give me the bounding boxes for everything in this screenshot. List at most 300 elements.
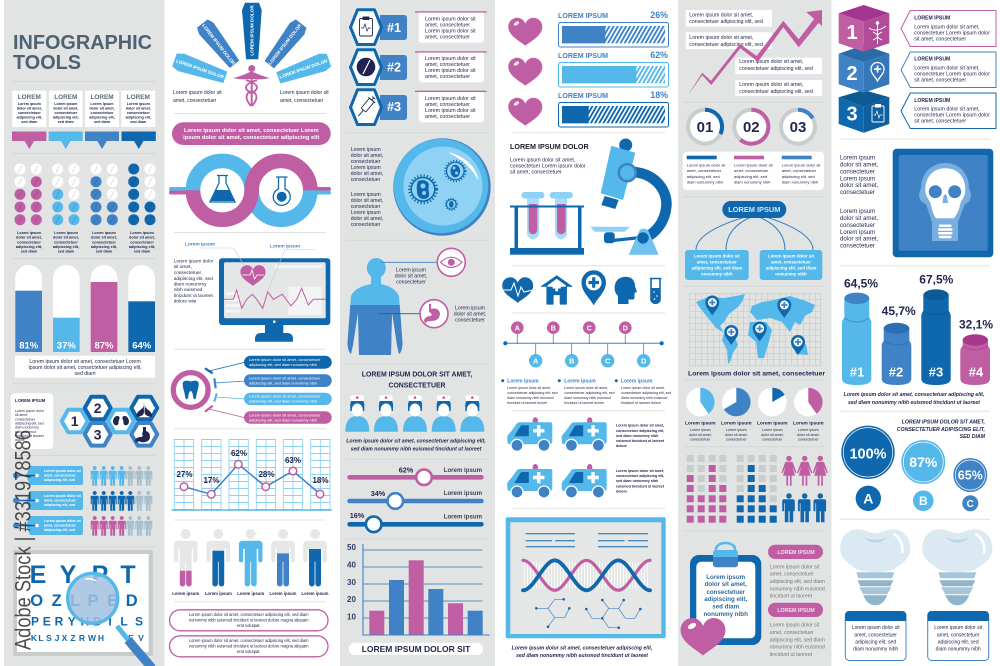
tooth ring diagram: Lorem ipsum dolor sit amet, consectetuer bbox=[249, 412, 321, 417]
text: x-ray: Lorem ipsum bbox=[840, 154, 875, 161]
x-ray skull bbox=[893, 149, 993, 257]
text card: lorem ipsum: consectetuer bbox=[15, 417, 36, 421]
three bulleted columns: consectetuer adipiscing elit, sed bbox=[507, 391, 558, 395]
pink heading pill: ipsum dolor sit amet, consectetuer adipiscing elit bbox=[183, 135, 319, 141]
cube callouts: consectetuer Lorem ipsum dolor bbox=[914, 113, 990, 119]
DNA caption: Lorem ipsum dolor sit amet, consectetuer adipiscing elit, bbox=[512, 646, 652, 652]
text: x-ray: Lorem ipsum bbox=[840, 229, 875, 236]
flow diagram: Lorem ipsum dolor sit bbox=[694, 254, 740, 259]
pink pills with gray text: amet, consectetuer bbox=[770, 630, 814, 636]
pie charts: Lorem ipsum bbox=[721, 420, 752, 426]
text card: lorem ipsum: Lorem ipsum dolor bbox=[15, 409, 45, 413]
ambulance text 2: sed diam nonummy nibh bbox=[616, 479, 658, 483]
tooth ring diagram: adipiscing elit, sed diam nonummy nibh bbox=[249, 399, 317, 404]
stacked cubes: 2 bbox=[846, 63, 858, 85]
hearts bbox=[508, 18, 542, 126]
text: radial left: Lorem ipsum dolor sit bbox=[173, 90, 222, 96]
panel: four lorem cards: LOREM bbox=[54, 94, 77, 101]
ambulances bbox=[507, 417, 607, 498]
human body diagram bbox=[348, 248, 486, 355]
flow diagram: amet, consectetuer bbox=[771, 260, 811, 265]
pie charts: Lorem ipsum bbox=[793, 420, 824, 426]
panel: four lorem cards: dolor sit amet, bbox=[89, 106, 115, 110]
text boxes with pink rule: amet, consectetuer bbox=[425, 22, 470, 28]
eye chart bbox=[13, 550, 153, 656]
progress bars: 26% bbox=[650, 10, 668, 20]
pill captions: consectetuer bbox=[130, 240, 154, 244]
pink pills with gray text: nonummy nibh euismod bbox=[770, 645, 825, 651]
pink heading pill: Lorem ipsum dolor sit amet, consectetuer Lorem bbox=[184, 128, 319, 134]
three bulleted columns: diam nonummy nibh euismod bbox=[621, 396, 667, 400]
text card: lorem ipsum: tincidunt ut laoreet bbox=[15, 434, 44, 438]
percent circles heading: CONSECTETUER ADIPISCING ELIT, bbox=[897, 427, 985, 433]
timeline: C bbox=[587, 325, 592, 332]
donut legend card: amet, consectetuer bbox=[782, 168, 817, 173]
tooth ring diagram bbox=[173, 356, 332, 424]
outlined text box 1: Lorem ipsum dolor sit amet, consectetuer adipiscing elit, sed diam bbox=[189, 612, 309, 617]
world map bbox=[690, 293, 821, 366]
text: petri dish: Lorem ipsum bbox=[351, 210, 381, 216]
DNA panel bbox=[506, 517, 666, 638]
bar chart caption bbox=[15, 356, 155, 378]
eye chart: E bbox=[43, 615, 51, 629]
clipboard with heart: consectetuer bbox=[706, 589, 746, 596]
text boxes behind arrow: Lorem ipsum dolor sit amet, bbox=[689, 35, 753, 41]
three bulleted columns: Lorem ipsum dolor sit amet, bbox=[621, 386, 665, 390]
text: x-ray: dolor sit amet, bbox=[840, 182, 879, 189]
text card: lorem ipsum: LOREM IPSUM bbox=[15, 398, 46, 403]
stacked cubes: 1 bbox=[846, 22, 858, 44]
eye chart: L bbox=[38, 633, 44, 643]
bar chart: 40 bbox=[347, 560, 356, 570]
pie charts: Lorem ipsum bbox=[757, 420, 788, 426]
sliders: 62% bbox=[399, 465, 414, 474]
human body diagram: consectetuer bbox=[455, 318, 485, 324]
outlined text box 2 bbox=[170, 636, 328, 657]
cube callouts: LOREM IPSUM bbox=[914, 57, 950, 63]
background panel: column 3 bbox=[340, 0, 495, 666]
bar chart: 10 bbox=[347, 612, 356, 621]
women and men pictograms bbox=[781, 456, 828, 522]
hexagon cluster: 2 bbox=[94, 400, 102, 416]
stock watermark: Adobe Stock | #331978586 bbox=[10, 430, 36, 650]
progress bars: LOREM IPSUM bbox=[558, 12, 608, 20]
pill captions: dolor sit amet, bbox=[129, 236, 155, 240]
cylinder chart: 45,7% bbox=[882, 304, 916, 318]
radial banners: LOREM IPSUM DOLOR bbox=[201, 23, 236, 66]
human fill figures: Lorem ipsum bbox=[172, 591, 199, 596]
pill captions: sed diam bbox=[96, 250, 113, 254]
text: x-ray: Lorem ipsum bbox=[840, 175, 875, 182]
pill captions bbox=[16, 231, 155, 254]
three bulleted columns: consectetuer adipiscing elit, sed bbox=[621, 391, 671, 395]
tooth ring diagram: adipiscing elit, sed diam nonummy nibh bbox=[249, 380, 317, 385]
ambulance text 2: consectetuer adipiscing elit, bbox=[616, 474, 664, 478]
panel: four lorem cards: sed diam bbox=[58, 120, 75, 124]
donut legend card bbox=[683, 152, 824, 190]
text: petri dish: dolor sit amet, bbox=[351, 216, 383, 222]
eye chart: P bbox=[87, 592, 99, 610]
ambulance text 1: dolore bbox=[616, 444, 627, 448]
panel: four lorem cards: dolor sit amet, bbox=[17, 106, 42, 110]
cube callouts: sit amet, consectetuer bbox=[914, 78, 966, 84]
pink pills with gray text: nonummy nibh euismod bbox=[770, 586, 825, 592]
cube callouts bbox=[901, 10, 996, 128]
timeline: A bbox=[515, 325, 520, 332]
eye chart: X bbox=[62, 633, 68, 643]
cylinder caption: Lorem ipsum dolor sit amet, consectetuer adipiscing elit, bbox=[844, 392, 984, 398]
percent circles bbox=[841, 426, 987, 511]
bar chart: 30 bbox=[347, 578, 356, 587]
capsule bar chart: 37% bbox=[57, 340, 76, 352]
eye chart: T bbox=[120, 561, 136, 589]
three bulleted columns: tincidunt ut laoreet dolore bbox=[621, 401, 661, 405]
text: x-ray: Lorem ipsum bbox=[840, 208, 875, 215]
text card: lorem ipsum: diam nonummy bbox=[15, 426, 39, 430]
panel: four lorem cards: dolor sit amet, bbox=[53, 106, 78, 110]
pink pills with gray text bbox=[768, 545, 825, 658]
ambulance text 1: consectetuer adipiscing elit, bbox=[616, 429, 664, 433]
title: INFOGRAPHIC bbox=[13, 32, 152, 54]
text boxes behind arrow bbox=[686, 10, 822, 96]
eye chart: O bbox=[30, 592, 43, 610]
text card: lorem ipsum: nibh euismod bbox=[15, 430, 36, 434]
progress bars bbox=[558, 10, 668, 127]
text card: lorem ipsum: adipiscing elit, sed bbox=[15, 422, 44, 426]
people pictogram rows bbox=[91, 466, 152, 536]
donut legend card: Lorem ipsum dolor sit bbox=[782, 162, 821, 168]
outlined text box 1 bbox=[170, 610, 328, 631]
donut legend card: diam nonummy nibh bbox=[782, 180, 818, 185]
sliders: 34% bbox=[371, 489, 386, 498]
text: monitor description: Lorem ipsum dolor bbox=[174, 258, 214, 264]
donut legend card: Lorem ipsum dolor sit bbox=[687, 162, 726, 168]
implant text card 1 bbox=[845, 611, 906, 660]
nurses heading: CONSECTETUER bbox=[388, 382, 446, 389]
radial banners: LOREM IPSUM DOLOR bbox=[249, 5, 254, 56]
text: radial left: amet, consectetuer bbox=[173, 98, 217, 104]
clipboard with heart: nonummy nibh bbox=[704, 611, 748, 618]
eye chart: P bbox=[31, 615, 39, 629]
panel: four lorem cards: consectetuer bbox=[54, 111, 78, 115]
eye chart: Y bbox=[68, 615, 76, 629]
panel: four lorem cards: dolor sit amet, bbox=[126, 106, 151, 110]
timeline: B bbox=[551, 325, 556, 332]
pill captions: adipiscing elit, bbox=[129, 245, 155, 249]
DNA caption: sed diam nonummy nibh euismod tincidunt ut laoreet bbox=[516, 653, 648, 659]
pill captions: adipiscing elit, bbox=[16, 245, 42, 249]
text: radial right: amet, consectetuer bbox=[280, 98, 324, 104]
callouts with pins bbox=[13, 466, 83, 535]
pill captions: dolor sit amet, bbox=[16, 236, 42, 240]
text: x-ray: dolor sit amet, bbox=[840, 215, 879, 222]
text: petri dish: Lorem ipsum bbox=[351, 192, 381, 198]
panel: four lorem cards: adipiscing elit, bbox=[16, 115, 42, 119]
implant text card 2: amet, consectetuer bbox=[937, 632, 980, 638]
map caption: Lorem ipsum dolor sit amet, consectetuer bbox=[688, 370, 825, 377]
nurses row bbox=[345, 395, 484, 432]
grid line chart: 62% bbox=[231, 449, 247, 458]
numbered hexagons list: #3 bbox=[387, 100, 401, 114]
test tubes and rack bbox=[510, 192, 584, 255]
donut legend card: amet, consectetuer bbox=[734, 168, 769, 173]
nurses caption: sed diam nonummy nibh euismod tincidunt ut laoreet bbox=[351, 446, 482, 452]
eye chart: K bbox=[31, 633, 38, 643]
text: x-ray: dolor sit amet, bbox=[840, 161, 879, 168]
hexagon cluster: 1 bbox=[71, 413, 79, 429]
hexagon cluster bbox=[62, 397, 157, 446]
pie charts: consectetuer bbox=[726, 438, 747, 442]
panel: four lorem cards: sed diam bbox=[21, 120, 38, 124]
monitor callout labels: Lorem ipsum bbox=[185, 242, 215, 248]
donut legend card: adipiscing elit, sed bbox=[734, 174, 767, 179]
flow diagram: adipiscing elit, sed diam bbox=[691, 266, 742, 271]
eye chart: D bbox=[93, 615, 102, 629]
bar chart bbox=[347, 543, 490, 635]
flow diagram: amet, consectetuer bbox=[697, 260, 737, 265]
microscope bbox=[590, 138, 666, 255]
panel: four lorem cards: LOREM bbox=[18, 94, 41, 101]
pink pills with gray text: LOREM IPSUM bbox=[777, 608, 815, 614]
clipboard with heart bbox=[681, 543, 761, 655]
text: monitor description: dolore wisi bbox=[174, 298, 196, 304]
panel: four lorem cards: adipiscing elit, bbox=[125, 115, 151, 119]
callouts with pins: adipiscing elit, sed bbox=[44, 478, 75, 482]
square waffle: blue bbox=[737, 455, 777, 523]
sliders: Lorem ipsum bbox=[444, 467, 483, 474]
pie charts: Lorem ipsum bbox=[798, 428, 819, 432]
text boxes behind arrow: Lorem ipsum dolor sit amet, bbox=[689, 13, 753, 19]
donut progress rings bbox=[688, 110, 815, 144]
cylinder chart: #3 bbox=[929, 365, 943, 380]
panel: four lorem cards: consectetuer bbox=[91, 111, 114, 115]
cylinder chart: #4 bbox=[969, 365, 984, 380]
flow diagram: Lorem ipsum dolor sit bbox=[768, 254, 815, 259]
implant text card 2: adipiscing elit, sed bbox=[938, 640, 979, 646]
panel: four lorem cards: LOREM bbox=[127, 94, 150, 101]
sliders: Lorem ipsum bbox=[444, 514, 483, 521]
sliders: Lorem ipsum bbox=[444, 490, 483, 497]
pink heading pill bbox=[172, 122, 331, 145]
text boxes behind arrow: consectetuer adipiscing elit, sed bbox=[739, 66, 813, 72]
donut legend card: adipiscing elit, sed bbox=[782, 174, 815, 179]
human fill figures bbox=[172, 529, 329, 596]
eye chart: P bbox=[92, 561, 108, 589]
tooth ring diagram: Lorem ipsum dolor sit amet, consectetuer bbox=[249, 357, 321, 362]
eye chart: S bbox=[135, 615, 143, 629]
callouts with pins: amet, consectetuer bbox=[44, 524, 77, 528]
text boxes behind arrow: Lorem ipsum dolor sit amet, bbox=[739, 82, 803, 88]
lab heading text: LOREM IPSUM DOLOR bbox=[510, 142, 589, 151]
pink pills with gray text: Lorem ipsum dolor sit bbox=[770, 623, 820, 629]
text: petri dish: Lorem ipsum bbox=[351, 147, 381, 153]
chart title pill: LOREM IPSUM DOLOR SIT bbox=[362, 644, 471, 654]
timeline: D bbox=[641, 356, 647, 366]
percent circles: C bbox=[967, 499, 974, 510]
background panel: column 5 bbox=[678, 0, 832, 666]
capsule bar chart: 81% bbox=[19, 340, 39, 352]
grid line chart: 27% bbox=[176, 470, 193, 479]
capsule bar chart bbox=[15, 265, 155, 352]
panel: four lorem cards: adipiscing elit, bbox=[89, 115, 115, 119]
implant text card 1: amet, consectetuer bbox=[854, 632, 897, 638]
pill captions: sed diam bbox=[21, 250, 38, 254]
text: petri dish: dolor sit amet, bbox=[351, 153, 383, 159]
flow diagram: nonummy nibh bbox=[701, 272, 733, 277]
pie charts: Lorem ipsum bbox=[726, 428, 747, 432]
pink pills with gray text: tincidunt ut laoreet bbox=[770, 594, 813, 600]
tooth ring diagram: Lorem ipsum dolor sit amet, consectetuer bbox=[249, 375, 321, 380]
radial banners: LOREM IPSUM DOLOR bbox=[279, 58, 329, 80]
text boxes with pink rule: Lorem ipsum dolor sit bbox=[425, 56, 476, 62]
text: x-ray: consectetuer bbox=[840, 168, 875, 175]
text boxes with pink rule: Lorem ipsum dolor sit bbox=[425, 108, 476, 114]
three bulleted columns: Lorem ipsum bbox=[621, 378, 653, 384]
panel: four lorem cards: Lorem ipsum bbox=[90, 102, 114, 106]
title: TOOLS bbox=[13, 52, 81, 74]
flow diagram bbox=[685, 201, 822, 280]
progress bars: 18% bbox=[650, 90, 668, 100]
text: x-ray: dolor sit amet, bbox=[840, 235, 879, 242]
text: monitor description: consectetuer bbox=[174, 270, 202, 276]
text: monitor description: sit amet, bbox=[174, 264, 192, 270]
panel: four lorem cards: adipiscing elit, bbox=[53, 115, 79, 119]
cube callouts: Lorem ipsum dolor sit amet, bbox=[914, 106, 980, 112]
timeline: B bbox=[569, 356, 575, 366]
cylinder chart: #1 bbox=[850, 365, 864, 380]
timeline bbox=[503, 321, 664, 367]
outlined text box 1: erat volutpat. bbox=[237, 623, 261, 628]
sliders bbox=[347, 465, 484, 532]
cylinder chart bbox=[842, 272, 993, 385]
text: x-ray: consectetuer bbox=[840, 242, 875, 249]
clipboard with heart: dolor sit amet, bbox=[705, 581, 747, 588]
donut legend card: amet, consectetuer bbox=[687, 168, 722, 173]
pill captions: adipiscing elit, bbox=[91, 245, 117, 249]
text boxes behind arrow: consectetuer adipiscing elit, sed bbox=[739, 89, 813, 95]
text: radial right: Lorem ipsum dolor sit bbox=[280, 90, 329, 96]
rising arrow bbox=[688, 10, 822, 95]
donut progress rings: 02 bbox=[743, 119, 760, 136]
pill captions: adipiscing elit, bbox=[53, 245, 79, 249]
cube callouts: sit amet, consectetuer bbox=[914, 119, 966, 125]
bar chart caption: Ipsum dolor sit amet, consectetuer adipiscing elit, bbox=[28, 365, 142, 371]
cylinder chart: 32,1% bbox=[959, 318, 993, 332]
text boxes behind arrow: Lorem ipsum dolor sit amet, bbox=[739, 59, 803, 65]
eye chart: E bbox=[30, 561, 46, 589]
pill captions: dolor sit amet, bbox=[91, 236, 117, 240]
pill captions: Lorem ipsum bbox=[92, 231, 117, 235]
cube callouts: consectetuer Lorem ipsum dolor bbox=[914, 72, 990, 78]
text boxes with pink rule bbox=[415, 11, 487, 122]
three bulleted columns: tincidunt ut laoreet dolore bbox=[564, 401, 604, 405]
eye chart: S bbox=[46, 633, 52, 643]
cylinder caption: sed diam nonummy nibh euismod tincidunt ut laoreet bbox=[848, 400, 980, 406]
donut legend card: adipiscing elit, sed bbox=[687, 174, 720, 179]
pill captions: consectetuer bbox=[54, 240, 78, 244]
chart title pill bbox=[349, 643, 483, 655]
text: petri dish: consectetuer bbox=[351, 222, 381, 228]
pie charts: Lorem ipsum bbox=[685, 420, 716, 426]
eye chart: E bbox=[128, 633, 134, 643]
text boxes with pink rule: Lorem ipsum dolor sit bbox=[425, 28, 476, 34]
three bulleted columns bbox=[501, 378, 671, 405]
percent circles: 100% bbox=[849, 446, 887, 462]
donut legend card: diam nonummy nibh bbox=[687, 180, 723, 185]
text boxes with pink rule: amet, consectetuer bbox=[425, 102, 470, 108]
implant text card 1: diam nonummy nibh bbox=[853, 646, 898, 652]
pie charts: consectetuer bbox=[690, 438, 711, 442]
percent circles: 87% bbox=[909, 454, 938, 470]
callouts with pins: Lorem ipsum dolor sit bbox=[44, 519, 82, 523]
three bulleted columns: diam nonummy nibh euismod bbox=[564, 396, 611, 400]
panel: four lorem cards: consectetuer bbox=[127, 111, 150, 115]
speech banners bbox=[12, 132, 156, 149]
text: monitor description: tincidunt ut laoreet bbox=[174, 293, 214, 299]
hexagon cluster: 3 bbox=[94, 426, 102, 442]
human fill figures: Lorem ipsum bbox=[205, 591, 232, 596]
pie charts: Lorem ipsum bbox=[690, 428, 711, 432]
pill captions: Lorem ipsum bbox=[54, 231, 79, 235]
monitor with ECG bbox=[219, 258, 330, 342]
cylinder chart: 67,5% bbox=[919, 272, 954, 286]
callouts with pins: adipiscing elit, sed bbox=[44, 528, 75, 532]
text boxes with pink rule: Lorem ipsum dolor sit bbox=[425, 16, 476, 22]
pill captions: consectetuer bbox=[17, 240, 41, 244]
stacked cubes: 3 bbox=[846, 104, 858, 126]
pink pills with gray text: adipiscing elit, sed diam bbox=[770, 637, 825, 643]
grid line chart: 63% bbox=[285, 456, 301, 465]
text: monitor description: adipiscing elit, sed bbox=[174, 276, 213, 282]
pill captions: consectetuer bbox=[92, 240, 116, 244]
progress bars: LOREM IPSUM bbox=[558, 92, 608, 100]
text boxes behind arrow: consectetuer adipiscing elit, sed bbox=[689, 42, 763, 48]
percent circles heading: LOREM IPSUM DOLOR SIT AMET, bbox=[902, 420, 985, 426]
numbered hexagons list: #2 bbox=[387, 60, 401, 74]
grid line chart: 28% bbox=[258, 470, 275, 479]
pink pills with gray text: amet, consectetuer bbox=[770, 572, 814, 578]
eye chart: J bbox=[55, 633, 60, 643]
percent circles: A bbox=[863, 490, 873, 506]
eye chart: W bbox=[88, 633, 97, 643]
text: petri dish: dolor sit amet, bbox=[351, 171, 383, 177]
icon row bbox=[502, 270, 661, 305]
percent circles: 65% bbox=[958, 468, 983, 482]
panel: four lorem cards: Lorem ipsum bbox=[18, 102, 42, 106]
panel: four lorem cards: sed diam bbox=[130, 120, 147, 124]
bar chart caption: Lorem ipsum dolor sit amet, consectetuer Lorem bbox=[29, 359, 141, 365]
donut legend card: Lorem ipsum dolor sit bbox=[734, 162, 774, 168]
callouts with pins: adipiscing elit, sed bbox=[44, 503, 75, 507]
cylinder chart: 64,5% bbox=[844, 276, 878, 290]
flow diagram: adipiscing elit, sed diam bbox=[766, 266, 816, 271]
text: petri dish: Lorem ipsum bbox=[351, 165, 381, 171]
stacked cubes bbox=[839, 5, 889, 133]
panel: four lorem cards: LOREM bbox=[90, 94, 114, 101]
grid line chart bbox=[172, 440, 332, 510]
implant text card 2: Lorem ipsum dolor sit bbox=[934, 625, 983, 631]
outlined text box 2: erat volutpat. bbox=[237, 649, 261, 654]
ambulance text 1: Lorem ipsum dolor sit amet, bbox=[616, 424, 664, 428]
pie charts: dolor sit amet, bbox=[725, 433, 748, 437]
text: petri dish: dolor sit amet, bbox=[351, 198, 383, 204]
human fill figures: Lorem ipsum bbox=[270, 591, 297, 596]
text boxes with pink rule: amet, consectetuer bbox=[425, 114, 470, 120]
pill captions: Lorem ipsum bbox=[17, 231, 42, 235]
callouts with pins: Lorem ipsum dolor sit bbox=[44, 494, 82, 498]
three bulleted columns: Lorem ipsum bbox=[564, 378, 596, 384]
petri dish with bacteria bbox=[393, 138, 491, 236]
